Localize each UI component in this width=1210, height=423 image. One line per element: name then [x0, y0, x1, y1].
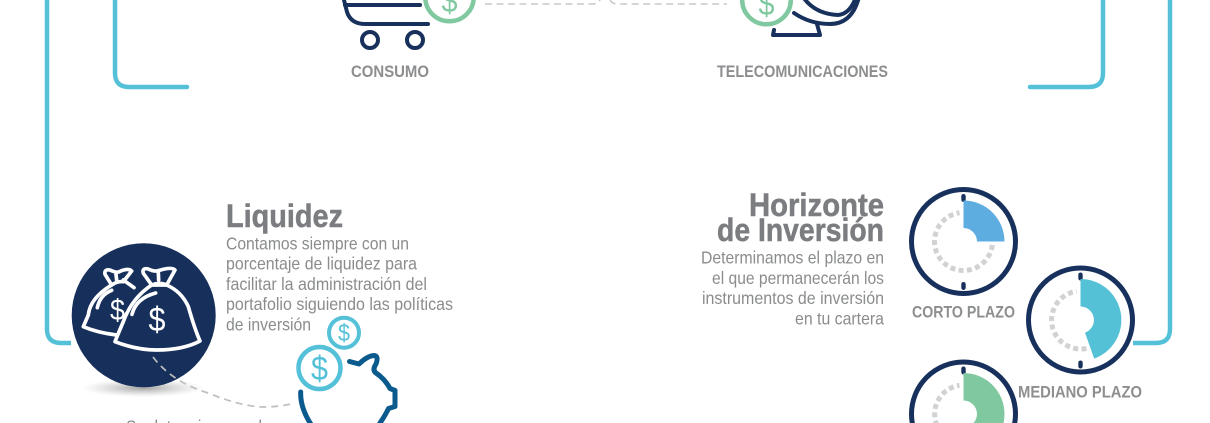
text: horizonte description: en tu cartera [795, 308, 884, 328]
text: liquidez description: portafolio siguiendo las políticas [226, 294, 453, 314]
heading: horizonte de inversión: de Inversión [717, 212, 884, 248]
inner frame left [115, 0, 187, 87]
text: horizonte description: instrumentos de inversión [702, 288, 884, 308]
text: horizonte description [701, 248, 884, 328]
text: liquidez description: facilitar la administración del [226, 274, 427, 294]
outer frame left [47, 0, 71, 343]
icon: money bags badge: $ [148, 301, 166, 339]
icon: money bags badge [72, 243, 216, 397]
text: horizonte description: el que permanecerán los [712, 268, 884, 288]
icon: piggy bank with coins: $ [311, 350, 328, 388]
inner frame right [1030, 0, 1103, 87]
icon: piggy bank with coins [298, 318, 395, 423]
text: liquidez description [226, 234, 453, 334]
label: consumo: CONSUMO [351, 62, 429, 81]
icon: shopping cart with coin [343, 0, 474, 48]
outer frame right [1133, 0, 1170, 343]
label: corto plazo: CORTO PLAZO [912, 302, 1015, 322]
label: telecomunicaciones: TELECOMUNICACIONES [717, 62, 888, 81]
heading: liquidez: Liquidez [226, 198, 343, 234]
heading: horizonte de inversión [717, 187, 884, 248]
icon: satellite dish with coin [742, 0, 859, 35]
icon: piggy bank with coins: $ [338, 320, 350, 347]
text: liquidez description: de inversión [226, 314, 311, 334]
label: mediano plazo: MEDIANO PLAZO [1018, 382, 1142, 402]
heading: horizonte de inversión: Horizonte [749, 187, 884, 223]
dashed connector between sectors [485, 0, 727, 4]
text: liquidez description: porcentaje de liquidez para [226, 254, 417, 274]
clock: corto plazo [912, 190, 1016, 294]
text: liquidez description: Contamos siempre con un [226, 234, 409, 254]
dashed connector to piggy bank [153, 357, 291, 407]
clock: mediano plazo [1028, 268, 1132, 372]
text: horizonte description: Determinamos el plazo en [701, 248, 884, 268]
icon: money bags badge: $ [110, 294, 125, 327]
clock: largo plazo [912, 362, 1016, 423]
